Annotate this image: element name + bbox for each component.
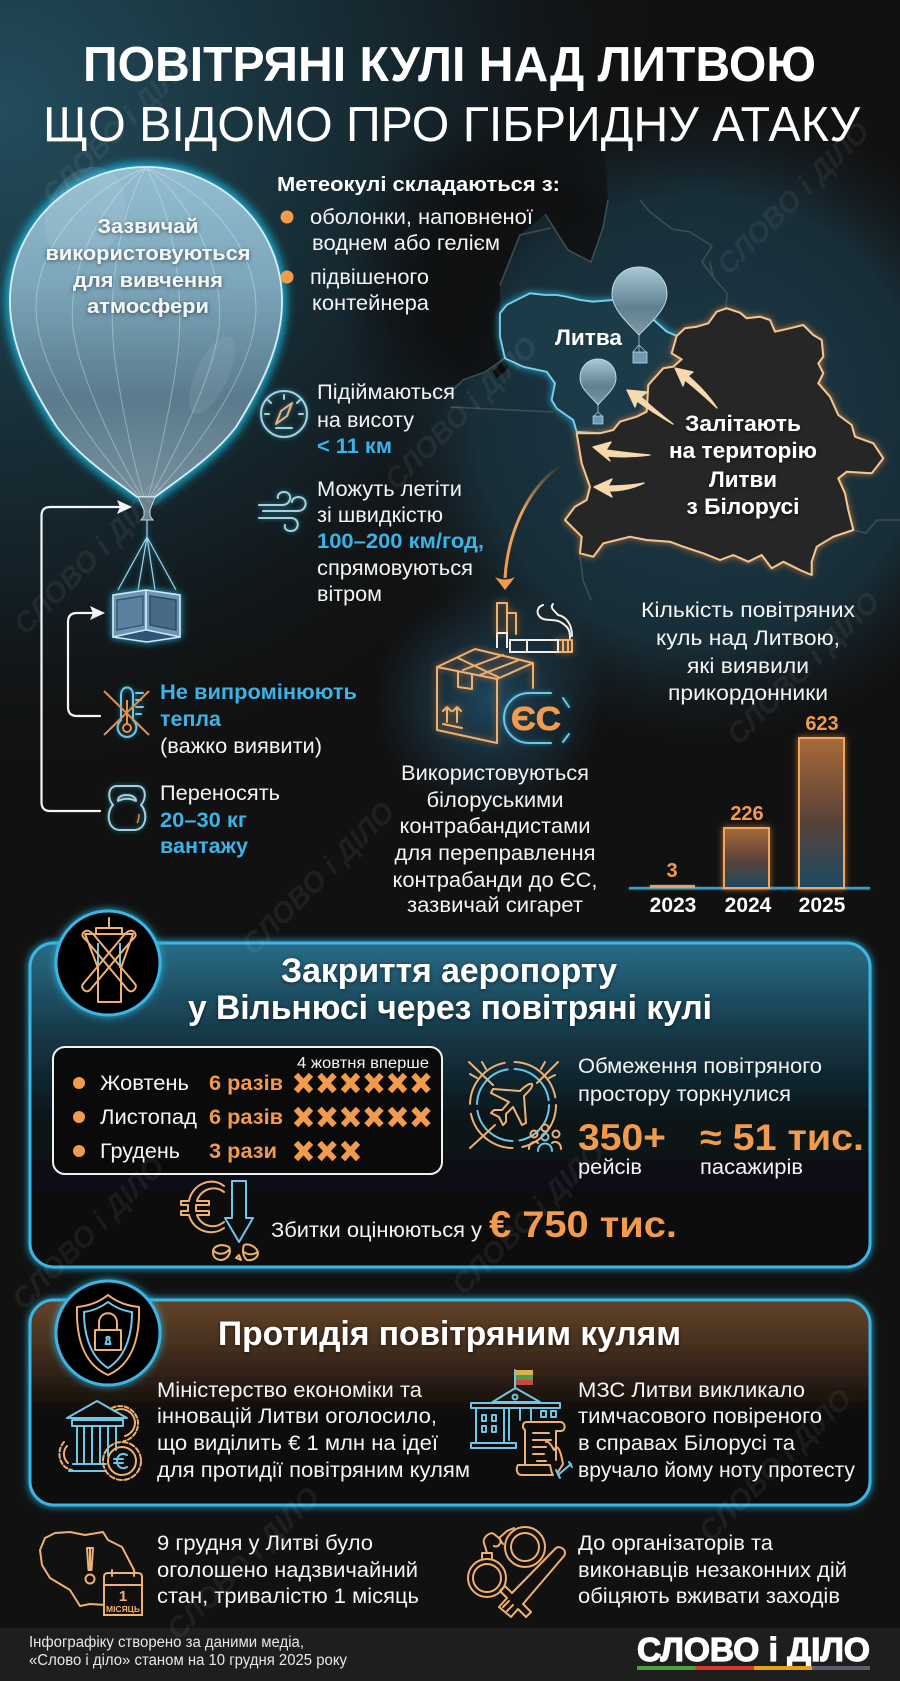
icon: shield with lock: [56, 1281, 160, 1385]
text: emergency: 9 грудня у Литві було: [157, 1532, 373, 1555]
watermarks: СЛОВО і ДІЛО: [161, 1481, 327, 1646]
icon: cigarettes, parcel, EU: ЄС: [511, 700, 561, 737]
text: smuggling: Використовуються: [401, 762, 589, 785]
row: November: 6 разів: [209, 1106, 283, 1129]
icon: kettlebell: [109, 786, 145, 830]
background: [0, 0, 900, 804]
text: smuggling: контрабанди до ЄС,: [392, 869, 598, 892]
bullet: container: [280, 266, 429, 315]
text: foreign ministry: МЗС Литви викликало: [578, 1379, 805, 1402]
text: damages: Збитки оцінюються у: [271, 1219, 483, 1242]
text: speed: спрямовуються: [317, 557, 473, 580]
text: payload: [160, 782, 280, 858]
icon: MFA building and note: [471, 1370, 572, 1478]
text: ministry of economy: інновацій Литви оголосило,: [157, 1405, 437, 1428]
watermarks: СЛОВО і ДІЛО: [8, 476, 174, 641]
text: foreign ministry: вручало йому ноту протесту: [578, 1459, 856, 1482]
heat block: [104, 681, 357, 758]
panel heading: у Вільнюсі через повітряні кулі: [188, 989, 712, 1027]
bar chart: [629, 713, 870, 917]
footer: [0, 1628, 900, 1681]
text: smuggling: білоруськими: [426, 789, 564, 812]
pointer arrows: [42, 500, 132, 811]
text: damages: [271, 1204, 677, 1245]
Belarus outline: [565, 308, 883, 575]
row: November: Листопад: [100, 1106, 197, 1129]
text: foreign ministry: в справах Білорусі та: [578, 1432, 795, 1455]
label: flying in from Belarus: з Білорусі: [686, 494, 800, 519]
text: responsibility: обіцяють вживати заходів: [578, 1585, 840, 1608]
row: October: Жовтень: [100, 1072, 189, 1095]
stat: passengers: пасажирів: [700, 1156, 803, 1179]
icon: euro losses: [181, 1181, 258, 1260]
source note: Інфографіку створено за даними медіа,: [29, 1634, 304, 1651]
label: flying in from Belarus: на територію: [669, 438, 817, 463]
block: state of emergency: [40, 1532, 419, 1615]
icon: crossed thermometer: [104, 688, 149, 737]
text: smuggling: [392, 762, 598, 917]
stat: flights: 350+: [578, 1117, 666, 1158]
label: flying in from Belarus: [669, 411, 817, 519]
text: foreign ministry: [578, 1379, 856, 1482]
text: speed: [317, 478, 484, 606]
watermarks: СЛОВО і ДІЛО: [693, 1383, 859, 1548]
text: responsibility: виконавців незаконних дій: [578, 1559, 847, 1582]
icon: cigarettes, parcel, EU: [437, 603, 572, 743]
watermarks: СЛОВО і ДІЛО: [36, 46, 202, 211]
row: December: Грудень: [100, 1140, 180, 1163]
cream arrows into Lithuania: [593, 368, 717, 497]
panel: countermeasures: [30, 1281, 870, 1505]
balloon caption: використовуються: [46, 242, 250, 265]
label: flying in from Belarus: Литви: [709, 467, 777, 492]
payload rigging: [118, 520, 176, 590]
icon: Lithuania with calendar: МІСЯЦЬ: [106, 1604, 140, 1614]
block: responsibility: [468, 1527, 847, 1617]
text: no heat: (важко виявити): [160, 735, 322, 758]
text: payload: вантажу: [160, 835, 248, 858]
row: October: [73, 1072, 426, 1095]
text: altitude: [317, 381, 455, 458]
text: airspace restrictions: простору торкнулися: [578, 1083, 791, 1106]
bar chart: 2024: [725, 894, 772, 917]
text: smuggling: контрабандистами: [400, 815, 590, 838]
icon: Lithuania with calendar: 1: [119, 1588, 127, 1605]
title: [43, 38, 861, 152]
text: no heat: тепла: [160, 708, 221, 731]
bar chart: 3: [666, 860, 678, 882]
stat: flights: рейсів: [578, 1156, 642, 1179]
source note: [29, 1634, 347, 1669]
watermarks: СЛОВО і ДІЛО: [379, 331, 545, 496]
logo: СЛОВО і ДІЛО: [637, 1631, 870, 1668]
text: altitude: на висоту: [317, 409, 415, 432]
chart heading: куль над Литвою,: [656, 627, 840, 650]
altitude block: [261, 381, 455, 458]
icon: wind: [259, 492, 306, 531]
panel heading: Протидія повітряним кулям: [218, 1315, 681, 1353]
heading: composition: Метеокулі складаються з:: [277, 173, 560, 196]
text: emergency: стан, тривалістю 1 місяць: [157, 1585, 419, 1608]
balloon caption: Зазвичай: [98, 215, 198, 238]
panel heading: Закриття аеропорту: [281, 952, 617, 990]
bar chart: 2023: [650, 894, 696, 917]
payload block: [109, 782, 280, 858]
text: speed: зі швидкістю: [317, 504, 443, 527]
row: December: [73, 1140, 356, 1163]
text: responsibility: [578, 1532, 847, 1608]
text: damages: € 750 тис.: [489, 1204, 677, 1245]
watermarks: СЛОВО і ДІЛО: [446, 1136, 612, 1301]
table: closures by month: [53, 1047, 442, 1174]
text: smuggling: зазвичай сигарет: [407, 894, 583, 917]
text: airspace restrictions: Обмеження повітряного: [578, 1055, 822, 1078]
large mini balloon: [612, 267, 667, 363]
balloon neck: [138, 497, 155, 520]
orange arrow to smuggling: [495, 465, 562, 590]
title: ПОВІТРЯНІ КУЛІ НАД ЛИТВОЮ: [83, 38, 816, 92]
bullet: shell: [280, 206, 533, 255]
text: no heat: Не випромінюють: [160, 681, 357, 704]
watermarks: СЛОВО і ДІЛО: [236, 796, 402, 961]
text: emergency: оголошено надзвичайний: [157, 1559, 418, 1582]
balloon caption: для вивчення: [73, 269, 223, 292]
text: foreign ministry: тимчасового повіреного: [578, 1405, 822, 1428]
icon: ministry with gears: [59, 1401, 141, 1480]
bullet: shell: воднем або гелієм: [312, 232, 500, 255]
smuggling block: [392, 603, 598, 917]
stat: passengers: [700, 1117, 864, 1179]
chart block: [629, 599, 870, 917]
bar chart: 623: [805, 713, 839, 735]
stat: passengers: ≈ 51 тис.: [700, 1117, 864, 1158]
text: ministry of economy: [157, 1379, 470, 1482]
watermarks: СЛОВО і ДІЛО: [721, 586, 887, 751]
table: closures by month: 4 жовтня вперше: [297, 1055, 429, 1072]
text: emergency: [157, 1532, 419, 1608]
chart heading: [641, 599, 856, 705]
row: December: 3 рази: [209, 1140, 277, 1163]
label: Lithuania: Литва: [555, 325, 623, 350]
watermarks: СЛОВО і ДІЛО: [711, 116, 877, 281]
map: Belarus and Lithuania: [450, 200, 900, 600]
stat: flights: [578, 1117, 666, 1179]
icon: handcuffs and baton: [468, 1527, 565, 1617]
source note: «Слово і діло» станом на 10 грудня 2025 року: [29, 1652, 347, 1669]
text: no heat: [160, 681, 357, 758]
text: speed: Можуть летіти: [317, 478, 462, 501]
icon: Lithuania with calendar: [40, 1532, 142, 1615]
row: November: [73, 1106, 426, 1129]
large balloon: [10, 154, 282, 642]
text: payload: Переносять: [160, 782, 280, 805]
text: airspace restrictions: [578, 1055, 822, 1106]
icon: crossed control tower: [56, 911, 160, 1015]
icon: gauge compass: [261, 391, 307, 437]
row: October: 6 разів: [209, 1072, 283, 1095]
text: speed: вітром: [317, 583, 382, 606]
payload box: [113, 590, 180, 642]
bullet: shell: оболонки, наповненої: [310, 206, 533, 229]
text: ministry of economy: Міністерство економіки та: [157, 1379, 422, 1402]
bar chart: 226: [730, 803, 764, 825]
balloon caption: атмосфери: [87, 295, 209, 318]
bar chart: 2025: [799, 894, 846, 917]
panel: airport closure: [30, 911, 870, 1267]
Lithuania border: [500, 293, 682, 433]
text: altitude: < 11 км: [317, 435, 392, 458]
small mini balloon: [580, 359, 616, 424]
text: speed: 100–200 км/год,: [317, 530, 484, 553]
chart heading: які виявили: [687, 655, 809, 678]
chart heading: прикордонники: [668, 682, 828, 705]
text: ministry of economy: що виділить € 1 млн на ідеї: [157, 1432, 438, 1455]
chart heading: Кількість повітряних: [641, 599, 856, 622]
icon: restricted airspace: [469, 1062, 561, 1151]
bullet: container: підвішеного: [310, 266, 429, 289]
speed block: [259, 478, 484, 606]
panel heading: [188, 952, 712, 1027]
watermarks: СЛОВО і ДІЛО: [6, 1151, 172, 1316]
text: altitude: Підіймаються: [317, 381, 455, 404]
text: ministry of economy: для протидії повітряним кулям: [157, 1459, 470, 1482]
balloon caption: [46, 215, 250, 318]
title: ЩО ВІДОМО ПРО ГІБРИДНУ АТАКУ: [43, 98, 861, 152]
bullet: container: контейнера: [312, 292, 429, 315]
label: flying in from Belarus: Залітають: [685, 411, 801, 436]
text: responsibility: До організаторів та: [578, 1532, 773, 1555]
text: smuggling: для переправлення: [394, 842, 596, 865]
text: payload: 20–30 кг: [160, 809, 247, 832]
composition text: [277, 173, 560, 315]
